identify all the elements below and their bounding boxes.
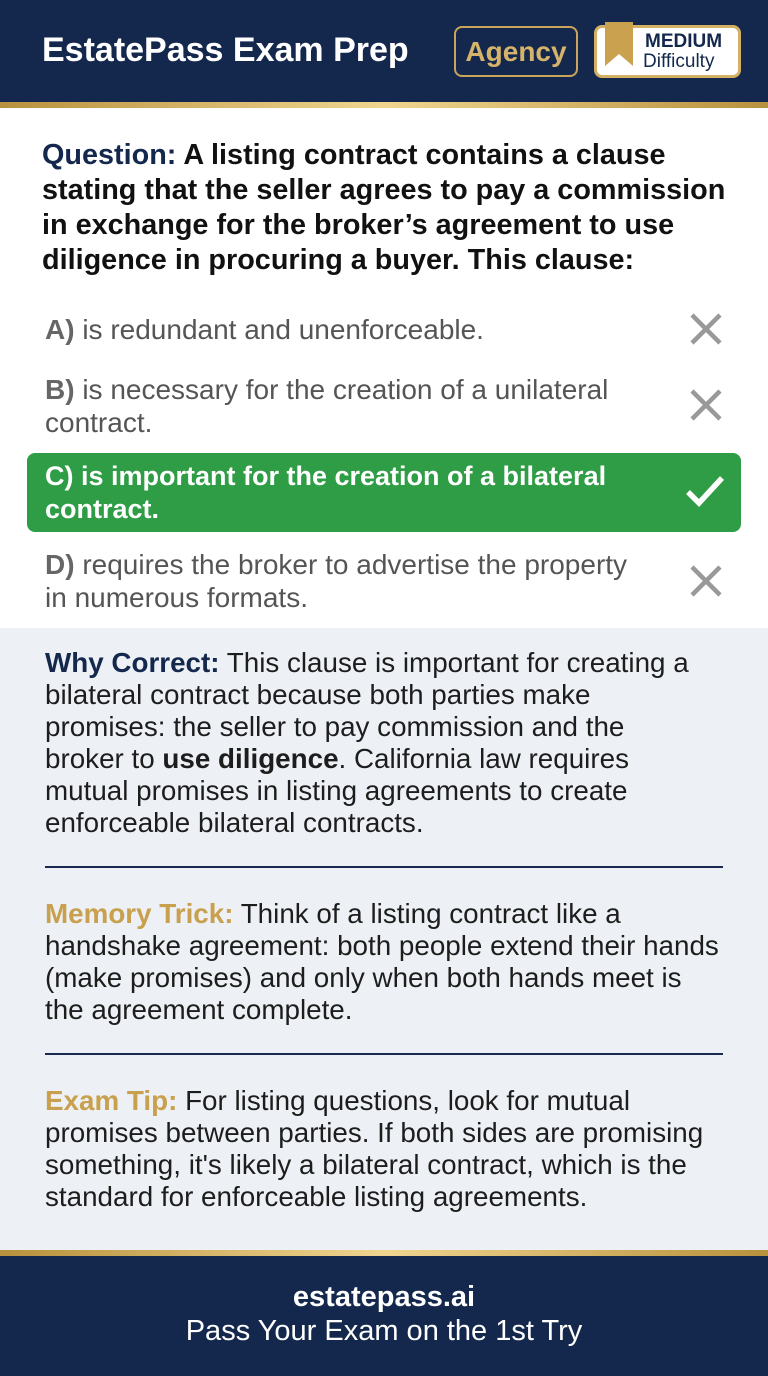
why correct: [45, 647, 689, 838]
exam tip: standard for enforceable listing agreements.: [45, 1181, 587, 1212]
exam tip: [45, 1085, 703, 1212]
icon: x D: [690, 566, 722, 596]
memory trick: the agreement complete.: [45, 994, 352, 1025]
question: in exchange for the broker’s agreement to use: [42, 209, 674, 241]
option C correct: [27, 453, 741, 532]
exam tip: Exam Tip: For listing questions, look for mutual: [45, 1085, 630, 1116]
why correct: promises: the seller to pay commission and the: [45, 711, 624, 742]
option B: B) is necessary for the creation of a unilateral: [45, 374, 608, 405]
option D: D) requires the broker to advertise the property: [45, 549, 627, 580]
exam tip: promises between parties. If both sides are promising: [45, 1117, 703, 1148]
badge: difficulty: MEDIUM: [645, 31, 722, 52]
option B: [45, 374, 608, 438]
header: [0, 0, 768, 102]
badge: difficulty: Difficulty: [643, 51, 714, 72]
option A: A) is redundant and unenforceable.: [45, 314, 484, 345]
option C correct: C) is important for the creation of a bilateral: [45, 461, 606, 491]
badge: difficulty: [594, 25, 741, 78]
why correct: mutual promises in listing agreements to create: [45, 775, 627, 806]
memory trick: handshake agreement: both people extend their hands: [45, 930, 719, 961]
option C correct: contract.: [45, 494, 159, 524]
icon: check: [686, 476, 724, 507]
footer: [0, 1256, 768, 1376]
why correct: enforceable bilateral contracts.: [45, 807, 424, 838]
option D: in numerous formats.: [45, 582, 308, 613]
memory trick: Memory Trick: Think of a listing contract like a: [45, 898, 621, 929]
icon: ribbon: [605, 22, 633, 66]
badge: Agency: Agency: [465, 36, 567, 67]
explanation panel: [0, 628, 768, 1250]
memory trick: [45, 898, 719, 1025]
option B: contract.: [45, 407, 152, 438]
question: diligence in procuring a buyer. This clause:: [42, 244, 634, 276]
question: [42, 139, 725, 276]
badge: Agency: [454, 26, 578, 77]
exam tip: something, it's likely a bilateral contract, which is the: [45, 1149, 687, 1180]
why correct: broker to use diligence. California law requires: [45, 743, 629, 774]
question: Question: A listing contract contains a clause: [42, 139, 666, 171]
footer: estatepass.ai: [293, 1281, 475, 1313]
icon: x B: [690, 390, 722, 420]
why correct: Why Correct: This clause is important for creating a: [45, 647, 689, 678]
icon: x A: [690, 314, 722, 344]
why correct: bilateral contract because both parties make: [45, 679, 590, 710]
title: EstatePass Exam Prep: [42, 31, 409, 69]
footer: Pass Your Exam on the 1st Try: [186, 1315, 582, 1347]
question: stating that the seller agrees to pay a commission: [42, 174, 725, 206]
option D: [45, 549, 627, 613]
memory trick: (make promises) and only when both hands meet is: [45, 962, 682, 993]
